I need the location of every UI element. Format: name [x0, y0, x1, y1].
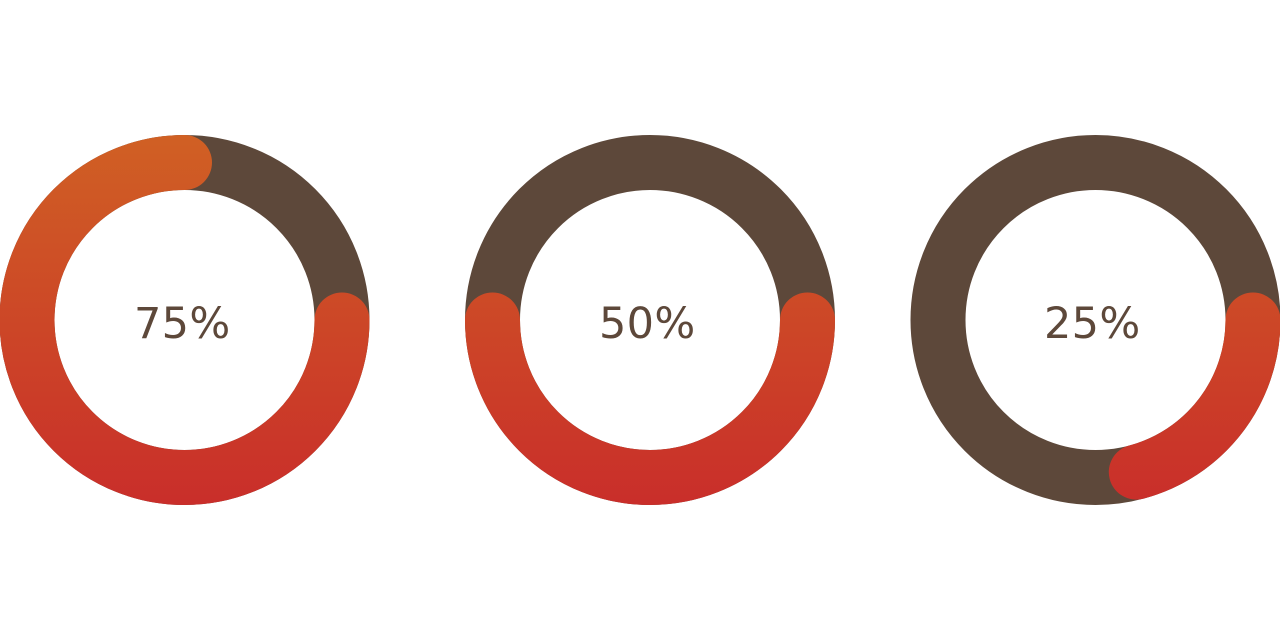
label 75%: 75% [134, 299, 230, 349]
label 50%: 50% [599, 299, 695, 349]
progress arc 25% [1136, 320, 1253, 472]
track ring 25% [938, 162, 1253, 478]
label 25%: 25% [1044, 299, 1140, 349]
donut chart: 75% [27, 162, 342, 478]
track ring 50% [492, 162, 808, 478]
progress arc 75% [27, 162, 342, 478]
donut chart: 50% [492, 162, 808, 478]
track ring 75% [27, 162, 342, 478]
donut chart: 25% [938, 162, 1253, 478]
progress arc 50% [492, 320, 808, 478]
